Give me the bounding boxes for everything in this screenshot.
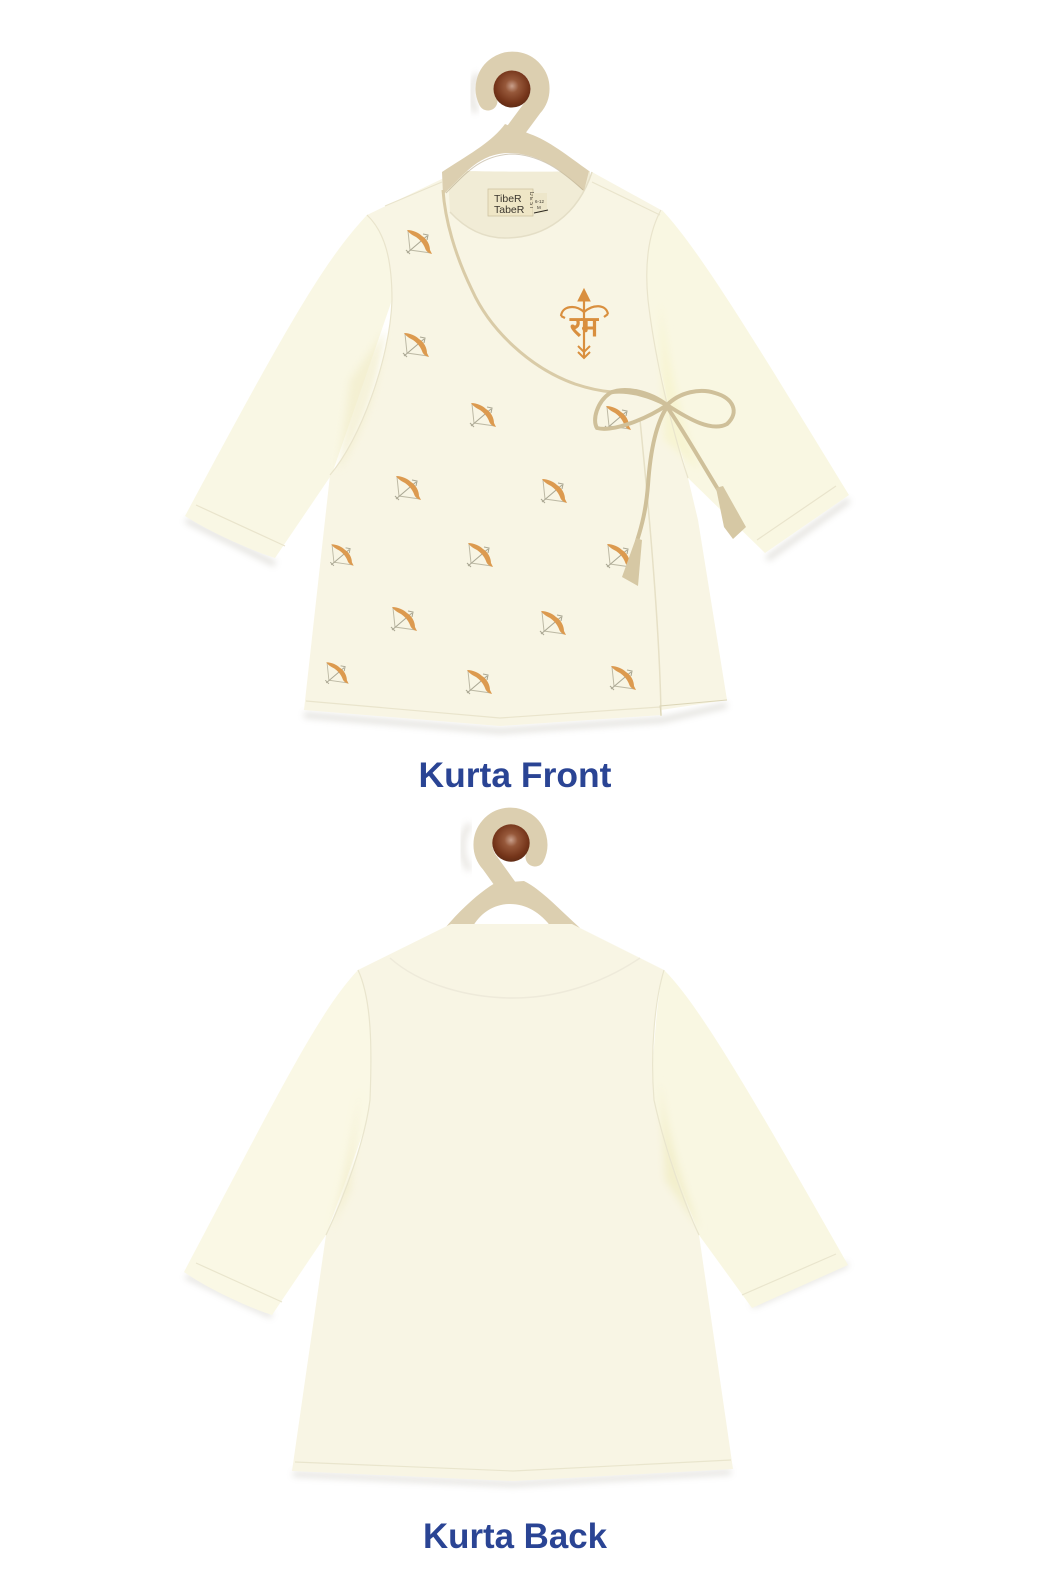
left sleeve — [184, 970, 376, 1315]
neck opening curve — [450, 172, 592, 238]
kurta body — [292, 924, 733, 1481]
garment shadow — [186, 1264, 848, 1484]
devanagari lettering: रम — [569, 311, 599, 342]
size label: M — [537, 205, 541, 210]
bow motif — [395, 476, 421, 500]
bow motif — [540, 611, 566, 635]
hanger arch line — [446, 154, 583, 193]
bow motif — [403, 333, 429, 357]
hanger shadow — [472, 74, 478, 112]
bow motif — [467, 543, 493, 567]
front piping — [443, 190, 612, 392]
bow motif — [541, 479, 567, 503]
sleeve fold shading — [338, 330, 385, 470]
kurta body — [304, 172, 727, 726]
right sleeve — [650, 970, 848, 1308]
hems and seams — [196, 970, 836, 1471]
size label — [533, 193, 548, 213]
back hanger — [445, 817, 580, 928]
right fold shading — [660, 1080, 700, 1230]
hems and seams — [196, 182, 836, 718]
right tassel — [716, 486, 746, 539]
hem overlap step — [660, 700, 727, 715]
left sleeve — [185, 215, 392, 558]
bow motif — [610, 666, 636, 690]
bow motif — [606, 544, 632, 568]
heading: kurta front: Kurta Front — [418, 756, 612, 795]
wooden knob — [492, 824, 530, 862]
bow motif — [605, 406, 631, 430]
embroidered bows — [325, 230, 636, 694]
left tassel — [622, 538, 642, 586]
heading: kurta back: Kurta Back — [423, 1517, 608, 1556]
brand label: TibeR — [494, 193, 522, 205]
bow motif — [391, 607, 417, 631]
bow motif — [466, 670, 492, 694]
panel: kurta front — [185, 61, 849, 731]
right sleeve — [645, 210, 849, 553]
bow motif — [330, 544, 354, 566]
back yoke curve — [390, 958, 640, 998]
bow motif — [406, 230, 432, 254]
wooden knob — [494, 70, 530, 108]
tie cord with bow — [595, 390, 746, 586]
inner back neck — [446, 170, 590, 240]
brand label: DESI — [528, 192, 534, 210]
seam shading right — [660, 300, 700, 470]
bow motif — [325, 662, 349, 684]
panel: kurta back — [184, 817, 848, 1484]
size label: 6-12 — [535, 199, 545, 204]
ram bow emblem — [561, 289, 608, 358]
hanger shadow — [462, 824, 470, 870]
brand label: TabeR — [494, 204, 525, 216]
brand label — [488, 189, 548, 216]
garment shadow — [186, 500, 849, 731]
front hanger — [442, 61, 589, 195]
bow motif — [470, 403, 496, 427]
sleeve fold shading — [330, 1090, 360, 1230]
